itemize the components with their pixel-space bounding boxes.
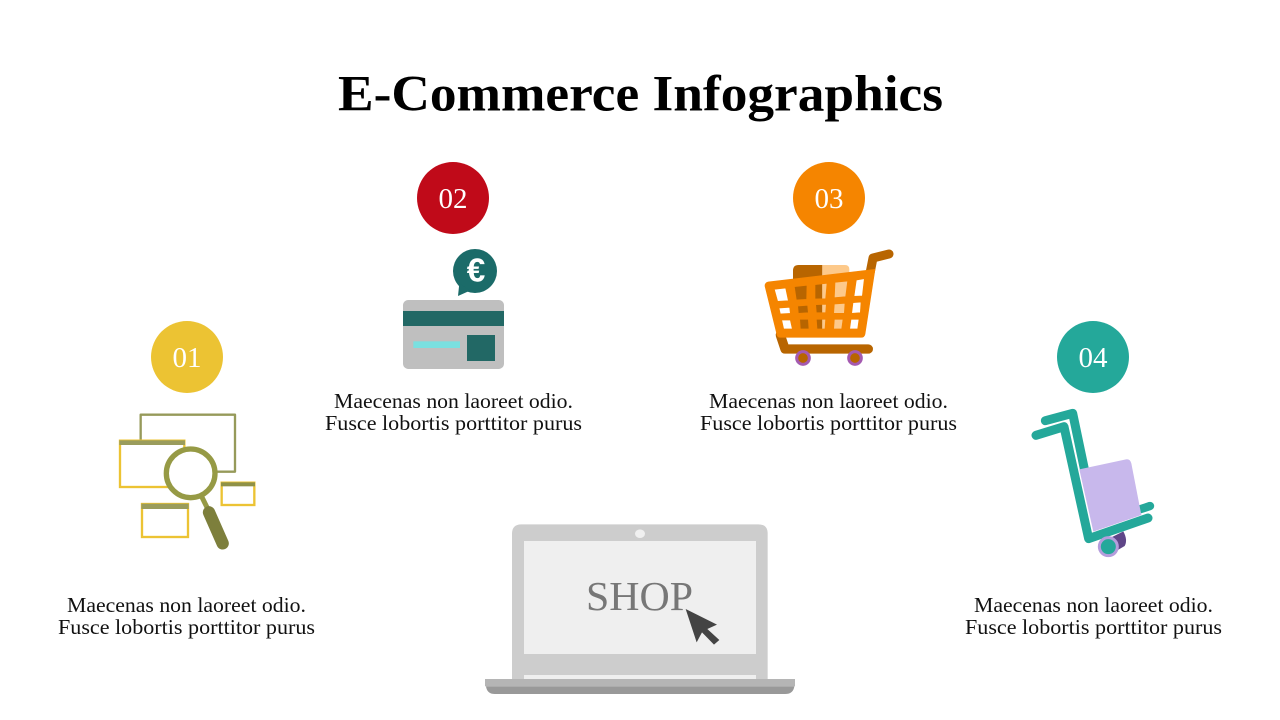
text block 04 (965, 593, 1222, 639)
icon: laptop with SHOP screen (485, 524, 795, 694)
icon: shopping cart (765, 254, 889, 364)
title: E-Commerce Infographics (338, 66, 943, 122)
text block 01: Maecenas non laoreet odio. (67, 593, 306, 617)
number badge 03 (793, 162, 865, 234)
icon: hand truck with parcel (1036, 413, 1150, 556)
text block 02: Maecenas non laoreet odio. (334, 389, 573, 413)
number badge 02: 02 (438, 183, 468, 215)
number badge 04 (1057, 321, 1129, 393)
number badge 04: 04 (1078, 342, 1108, 374)
number badge 02 (417, 162, 489, 234)
icon: credit card with euro bubble: € (467, 252, 485, 289)
text block 04: Maecenas non laoreet odio. (974, 593, 1213, 617)
text block 04: Fusce lobortis porttitor purus (965, 615, 1222, 639)
text block 02: Fusce lobortis porttitor purus (325, 411, 582, 435)
text block 01: Fusce lobortis porttitor purus (58, 615, 315, 639)
text block 03: Fusce lobortis porttitor purus (700, 411, 957, 435)
text block 02 (325, 389, 582, 435)
text block 01 (58, 593, 315, 639)
number badge 01 (151, 321, 223, 393)
icon: laptop with SHOP screen: SHOP (586, 573, 693, 619)
text block 03 (700, 389, 957, 435)
icon: browser windows and magnifier (119, 415, 255, 543)
number badge 01: 01 (172, 342, 202, 374)
text block 03: Maecenas non laoreet odio. (709, 389, 948, 413)
number badge 03: 03 (814, 183, 844, 215)
icon: credit card with euro bubble (403, 249, 504, 369)
